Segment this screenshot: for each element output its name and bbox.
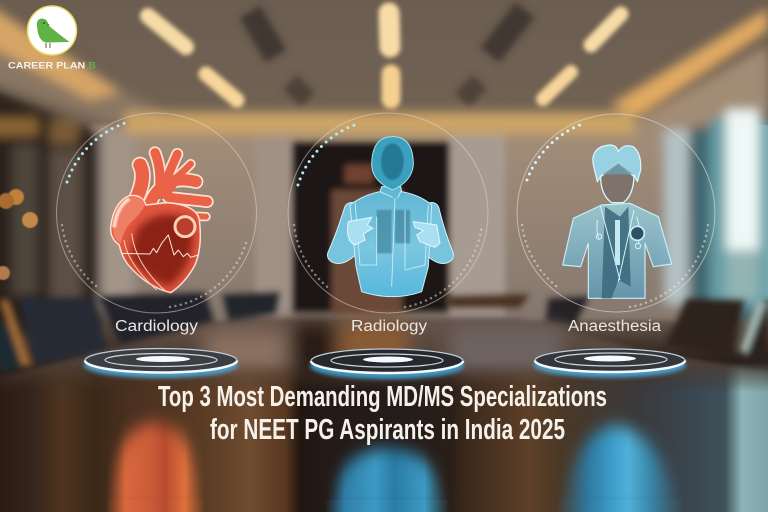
logo badge — [28, 6, 76, 55]
back wall — [90, 125, 690, 320]
icon: doctor figure — [563, 145, 672, 298]
conference table — [0, 318, 768, 512]
specialization: radiology — [288, 113, 488, 379]
label: Cardiology — [115, 318, 198, 335]
photo background: window and wall edges — [0, 125, 768, 335]
ceiling vents — [250, 10, 525, 100]
label: Radiology — [351, 318, 427, 335]
chairs — [0, 292, 768, 376]
hologram ring — [56, 113, 256, 313]
label: Anaesthesia — [568, 318, 661, 335]
left dark window wall — [0, 80, 134, 345]
central dark doorway — [255, 130, 505, 315]
icon: x-ray torso figure — [335, 137, 446, 297]
logo wordmark: CAREER PLAN B — [8, 60, 96, 72]
specialization: cardiology — [56, 113, 256, 378]
table reflection: wood tones — [0, 362, 768, 512]
title: for NEET PG Aspirants in India 2025 — [210, 414, 565, 446]
ceiling lights — [148, 13, 621, 100]
logo: Career Plan B — [8, 6, 96, 72]
table mid reflections — [110, 322, 562, 377]
specialization: anaesthesia — [517, 114, 715, 378]
bokeh lights — [0, 189, 38, 280]
title — [158, 381, 607, 446]
right side windows — [610, 45, 768, 320]
bird icon — [37, 18, 70, 42]
ceiling coves — [0, 0, 768, 134]
projector platform — [534, 349, 686, 378]
projector platform — [84, 348, 238, 378]
hologram ring — [288, 113, 488, 313]
hologram ring — [517, 114, 715, 312]
projector platform — [310, 349, 464, 379]
table reflection: hologram glows — [106, 412, 682, 512]
icon: anatomical heart — [111, 153, 207, 293]
